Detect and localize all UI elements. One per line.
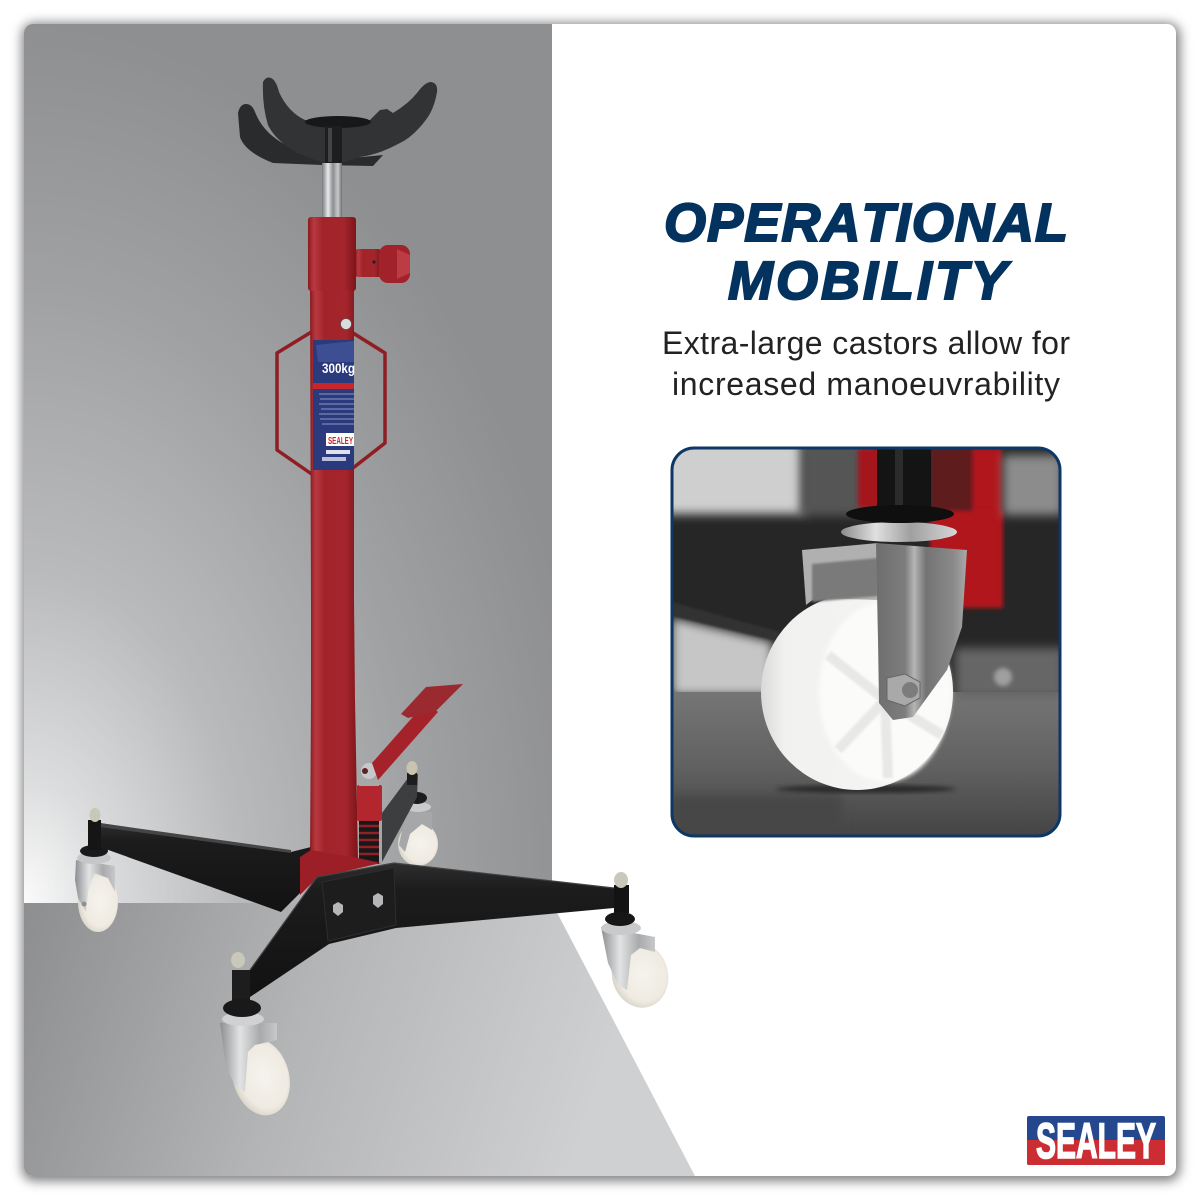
back arm [382,761,418,862]
heading [664,193,1068,311]
product label: SEALEY [328,436,353,447]
base and right front arms [250,863,614,997]
chrome rod [322,163,342,218]
grey studio background [24,24,695,1176]
back caster [398,792,438,866]
pump cylinder and spring [357,763,382,864]
description text: increased manoeuvrability [672,366,1060,402]
photo castor bracket [802,505,967,720]
left caster [75,845,118,932]
castor photo [660,440,1065,836]
product label [313,340,355,470]
right caster [601,872,676,1014]
heading: OPERATIONAL [664,193,1068,253]
heading: MOBILITY [728,251,1012,311]
left arm [88,808,311,912]
saddle top plate and neck [305,116,371,163]
main column [310,288,358,860]
photo backdrop [660,440,1063,695]
hexagonal handle [277,331,385,475]
front caster [220,952,298,1122]
product label: 300kg [322,360,355,376]
side knob [355,245,410,283]
saddle rear plate [238,104,383,166]
photo floor [672,648,1065,836]
description text [662,325,1070,402]
saddle front plate [263,78,437,163]
photo border [672,448,1060,836]
photo wheel [761,594,953,790]
description text: Extra-large castors allow for [662,325,1070,361]
transmission jack product [75,78,676,1122]
red base block [300,850,381,895]
foot pedal [372,684,463,780]
bolt [340,318,352,330]
top collar [308,217,356,291]
photo stem [877,448,931,510]
